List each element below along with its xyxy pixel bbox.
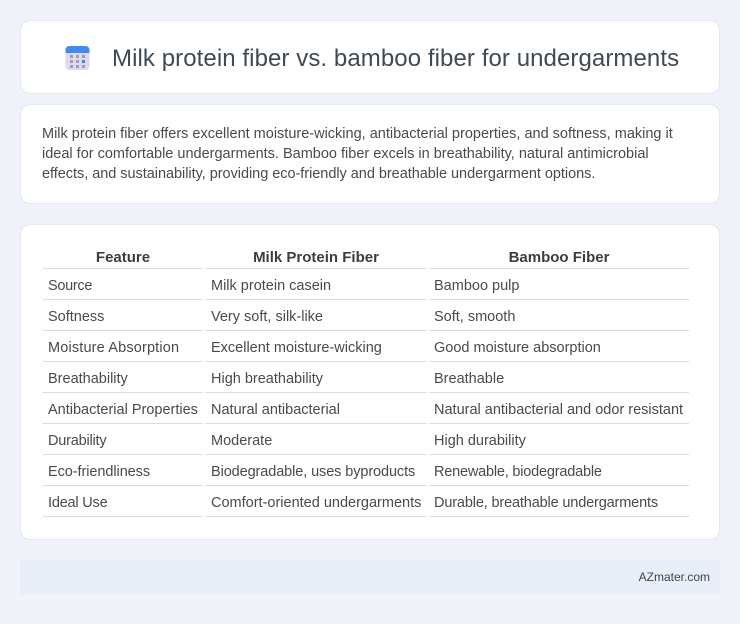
panel: summary — [20, 104, 720, 204]
row: durability: High durability — [434, 433, 526, 449]
footer bar — [20, 560, 720, 594]
row: eco-friendliness: Eco-friendliness — [48, 464, 150, 480]
row: source: Bamboo pulp — [434, 278, 519, 294]
title: Milk protein fiber vs. bamboo fiber for undergarments — [112, 45, 679, 72]
row: breathability — [48, 371, 504, 387]
table header: Milk Protein Fiber — [253, 249, 379, 266]
table header — [96, 249, 610, 266]
row: durability: Moderate — [211, 433, 272, 449]
row: ideal use: Ideal Use — [48, 495, 107, 511]
icon: calendar — [66, 46, 90, 70]
row: softness — [48, 309, 515, 325]
row: durability: Durability — [48, 433, 106, 449]
row: eco-friendliness: Renewable, biodegradable — [434, 464, 602, 480]
row: moisture absorption — [48, 340, 601, 356]
row: breathability: High breathability — [211, 371, 323, 387]
row: softness: Very soft, silk-like — [211, 309, 323, 325]
summary text: effects, and sustainability, providing eco-friendly and breathable undergarment options. — [42, 166, 595, 182]
row: source — [48, 278, 519, 294]
row: breathability: Breathable — [434, 371, 504, 387]
row: antibacterial properties: Antibacterial Properties — [48, 402, 198, 418]
panel: comparison table — [20, 224, 720, 540]
row: moisture absorption: Excellent moisture-wicking — [211, 340, 382, 356]
summary text: Milk protein fiber offers excellent moisture-wicking, antibacterial properties, and softness, making it — [42, 126, 673, 142]
row: antibacterial properties — [48, 402, 683, 418]
row: eco-friendliness — [48, 464, 602, 480]
panel: title card — [20, 20, 720, 94]
row: antibacterial properties: Natural antibacterial and odor resistant — [434, 402, 683, 418]
footer credit: AZmater.com — [639, 570, 710, 584]
row: moisture absorption: Moisture Absorption — [48, 340, 179, 356]
row: softness: Softness — [48, 309, 104, 325]
summary text — [42, 126, 673, 182]
table header: Bamboo Fiber — [509, 249, 609, 266]
row: durability — [48, 433, 526, 449]
row: ideal use: Durable, breathable undergarments — [434, 495, 658, 511]
row: ideal use — [48, 495, 658, 511]
row: moisture absorption: Good moisture absorption — [434, 340, 601, 356]
row: breathability: Breathability — [48, 371, 128, 387]
row: source: Source — [48, 278, 92, 294]
summary text: ideal for comfortable undergarments. Bamboo fiber excels in breathability, natural antimicrobial — [42, 146, 649, 162]
row: source: Milk protein casein — [211, 278, 331, 294]
row: ideal use: Comfort-oriented undergarments — [211, 495, 421, 511]
table header: Feature — [96, 249, 150, 266]
row: antibacterial properties: Natural antibacterial — [211, 402, 340, 418]
row: eco-friendliness: Biodegradable, uses byproducts — [211, 464, 415, 480]
row: softness: Soft, smooth — [434, 309, 515, 325]
